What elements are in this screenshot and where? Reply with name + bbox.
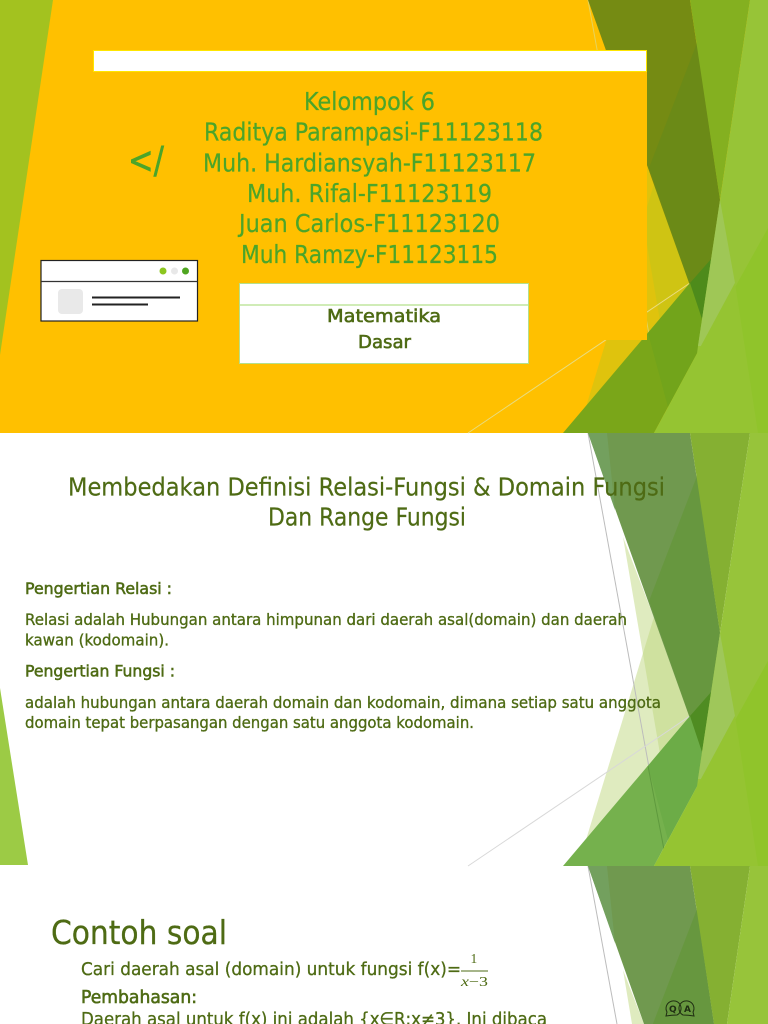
subject box: Matematika [327,306,441,327]
heading: group members: Kelompok 6 [304,87,435,116]
right geometric facets [588,866,768,1024]
text block: pengertian relasi: Relasi adalah Hubungan antara himpunan dari daerah asal(domain) dan daerah [25,610,627,629]
heading: slide 2 title: Dan Range Fungsi [268,502,466,532]
heading: contoh soal: Contoh soal [51,913,227,952]
fraction: 1 over x-3: 1 [470,951,477,966]
yellow content panel [93,71,647,340]
text block: discussion [81,987,547,1024]
fraction: 1 over x-3 [460,951,488,989]
icon: code symbol: </ [128,139,164,182]
icon: question and answer bubbles [666,1001,694,1016]
panel: slide 2 definitions [0,433,768,866]
white header bar [94,50,646,72]
text block: pengertian fungsi: domain tepat berpasangan dengan satu anggota kodomain. [25,713,474,732]
right geometric facets [468,433,768,866]
text block: question: Cari daerah asal (domain) untuk fungsi f(x)= [81,959,461,980]
heading: group members: Muh. Rifal-F11123119 [247,179,492,208]
text block: pengertian relasi [25,579,627,650]
subject box [240,284,528,364]
heading: group members: Muh Ramzy-F11123115 [241,240,498,269]
left green shard [0,0,53,355]
heading: group members: Muh. Hardiansyah-F11123117 [203,148,536,178]
panel: slide 3 example [51,866,768,1024]
text block: pengertian relasi: kawan (kodomain). [25,630,169,650]
text block: pengertian fungsi: Pengertian Fungsi : [25,662,175,680]
left green shard [0,688,28,865]
text block: pengertian relasi: Pengertian Relasi : [25,579,172,598]
heading: slide 2 title [68,472,665,532]
icon: question and answer bubbles: Q [669,1005,677,1015]
subject box: Dasar [358,332,412,353]
text block: pengertian fungsi: adalah hubungan antara daerah domain dan kodomain, dimana setiap satu anggota [25,693,661,712]
right geometric facets [468,0,768,433]
icon: browser window card [41,260,198,321]
panel: slide 1 cover [0,0,768,433]
icon: question and answer bubbles: A [684,1005,691,1015]
text block: pengertian fungsi [25,662,661,732]
heading: group members: Raditya Parampasi-F11123118 [204,118,543,146]
text block: discussion: Pembahasan: [81,987,197,1008]
fraction: 1 over x-3: x−3 [460,974,488,989]
heading: group members: Juan Carlos-F11123120 [237,209,500,238]
heading: slide 2 title: Membedakan Definisi Relasi-Fungsi & Domain Fungsi [68,472,665,502]
heading: group members [203,87,543,269]
